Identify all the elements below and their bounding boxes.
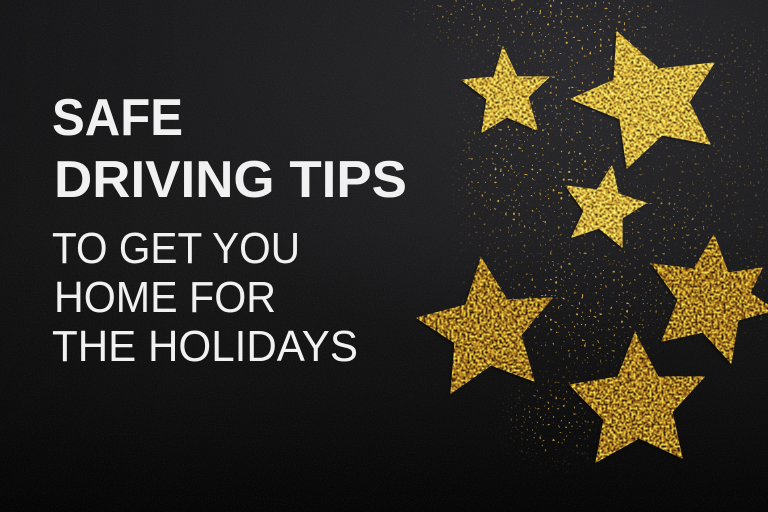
subtitle: THE HOLIDAYS (52, 323, 358, 371)
subtitle: HOME FOR (54, 274, 276, 322)
star: small upper left (462, 47, 549, 132)
star: large upper right (571, 32, 714, 168)
gold glitter dust scattered across the right side (400, 0, 768, 473)
star: small centre (566, 166, 646, 247)
subtitle (52, 225, 358, 371)
subtitle: TO GET YOU (52, 225, 300, 273)
star: right edge, cropped (652, 235, 768, 363)
star shadows (416, 34, 768, 464)
star: lower centre (570, 333, 704, 462)
title: SAFE (52, 89, 183, 147)
star: large lower left (417, 258, 552, 393)
title: DRIVING TIPS (54, 151, 407, 209)
title (52, 89, 407, 209)
